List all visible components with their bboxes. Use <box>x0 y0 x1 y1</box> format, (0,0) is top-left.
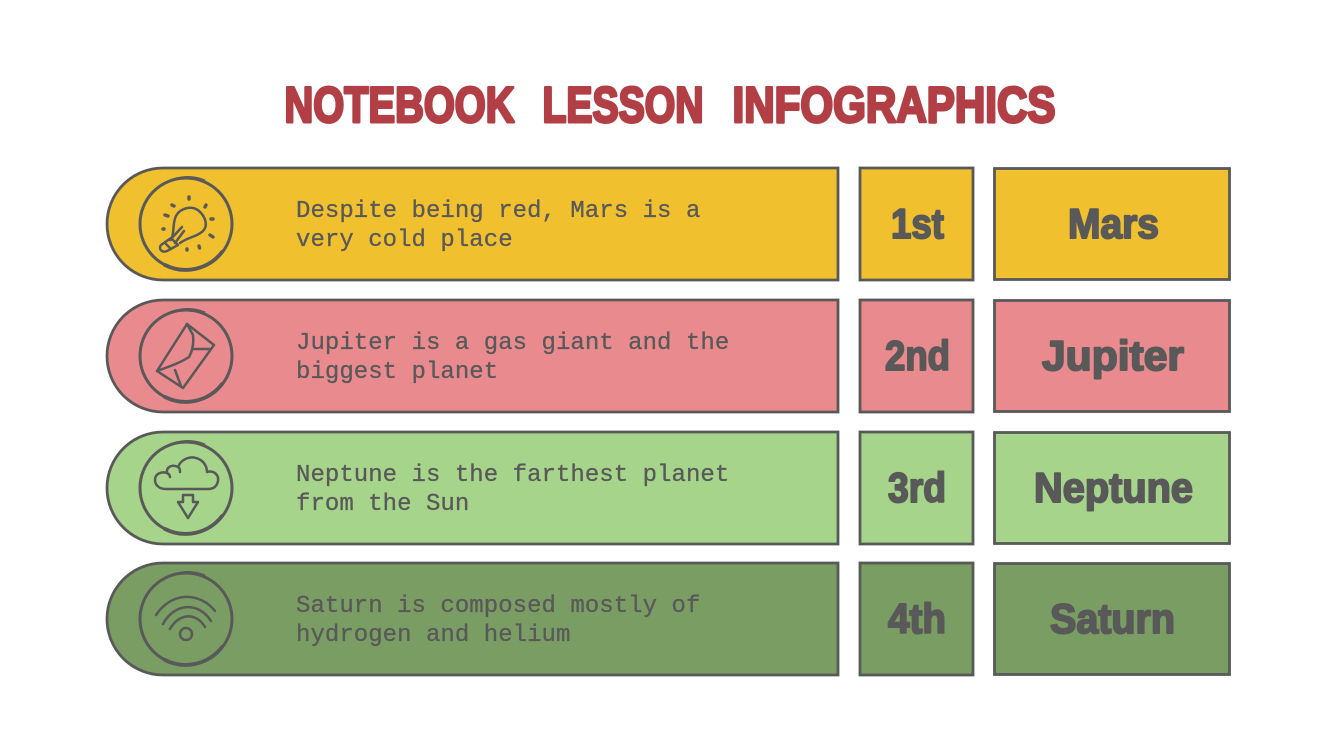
icon: cloud download <box>140 441 232 534</box>
rank box: 1st <box>860 168 973 280</box>
name box: Mars <box>994 168 1230 280</box>
rank: 3rd: 3rd <box>888 464 946 511</box>
title: INFOGRAPHICS <box>732 77 1056 133</box>
description: Mars: very cold place <box>296 227 513 254</box>
row 1: Mars <box>107 168 1230 280</box>
rank: 2nd: 2nd <box>885 332 950 379</box>
icon: light bulb <box>140 177 232 270</box>
title: NOTEBOOK <box>284 77 514 133</box>
name: Jupiter: Jupiter <box>1042 332 1184 379</box>
description: Jupiter: Jupiter is a gas giant and the <box>296 330 729 357</box>
description: Neptune: from the Sun <box>296 491 469 518</box>
rank box: 2nd <box>860 300 973 412</box>
name: Neptune: Neptune <box>1034 464 1193 511</box>
name box: Jupiter <box>994 300 1230 412</box>
name box: Neptune <box>994 432 1230 544</box>
icon: wifi <box>140 572 232 665</box>
name: Mars: Mars <box>1068 200 1159 247</box>
icon: envelope <box>140 309 232 402</box>
pill: Mars <box>107 168 838 280</box>
pill: Jupiter <box>107 300 838 412</box>
name box: Saturn <box>994 564 1230 674</box>
title: LESSON <box>542 77 704 133</box>
row 2: Jupiter <box>107 300 1230 412</box>
rank: 1st: 1st <box>891 200 944 247</box>
description: Neptune: Neptune is the farthest planet <box>296 462 729 489</box>
description: Mars: Despite being red, Mars is a <box>296 198 700 225</box>
description: Jupiter: biggest planet <box>296 359 498 386</box>
row 3: Neptune <box>107 432 1230 544</box>
rank box: 3rd <box>860 432 973 544</box>
rank: 4th: 4th <box>888 595 946 642</box>
rank box: 4th <box>860 563 973 675</box>
pill: Neptune <box>107 432 838 544</box>
pill: Saturn <box>107 563 838 675</box>
description: Saturn: Saturn is composed mostly of <box>296 593 700 620</box>
description: Saturn: hydrogen and helium <box>296 622 570 649</box>
title <box>284 77 1056 133</box>
row 4: Saturn <box>107 563 1230 675</box>
name: Saturn: Saturn <box>1050 595 1175 642</box>
